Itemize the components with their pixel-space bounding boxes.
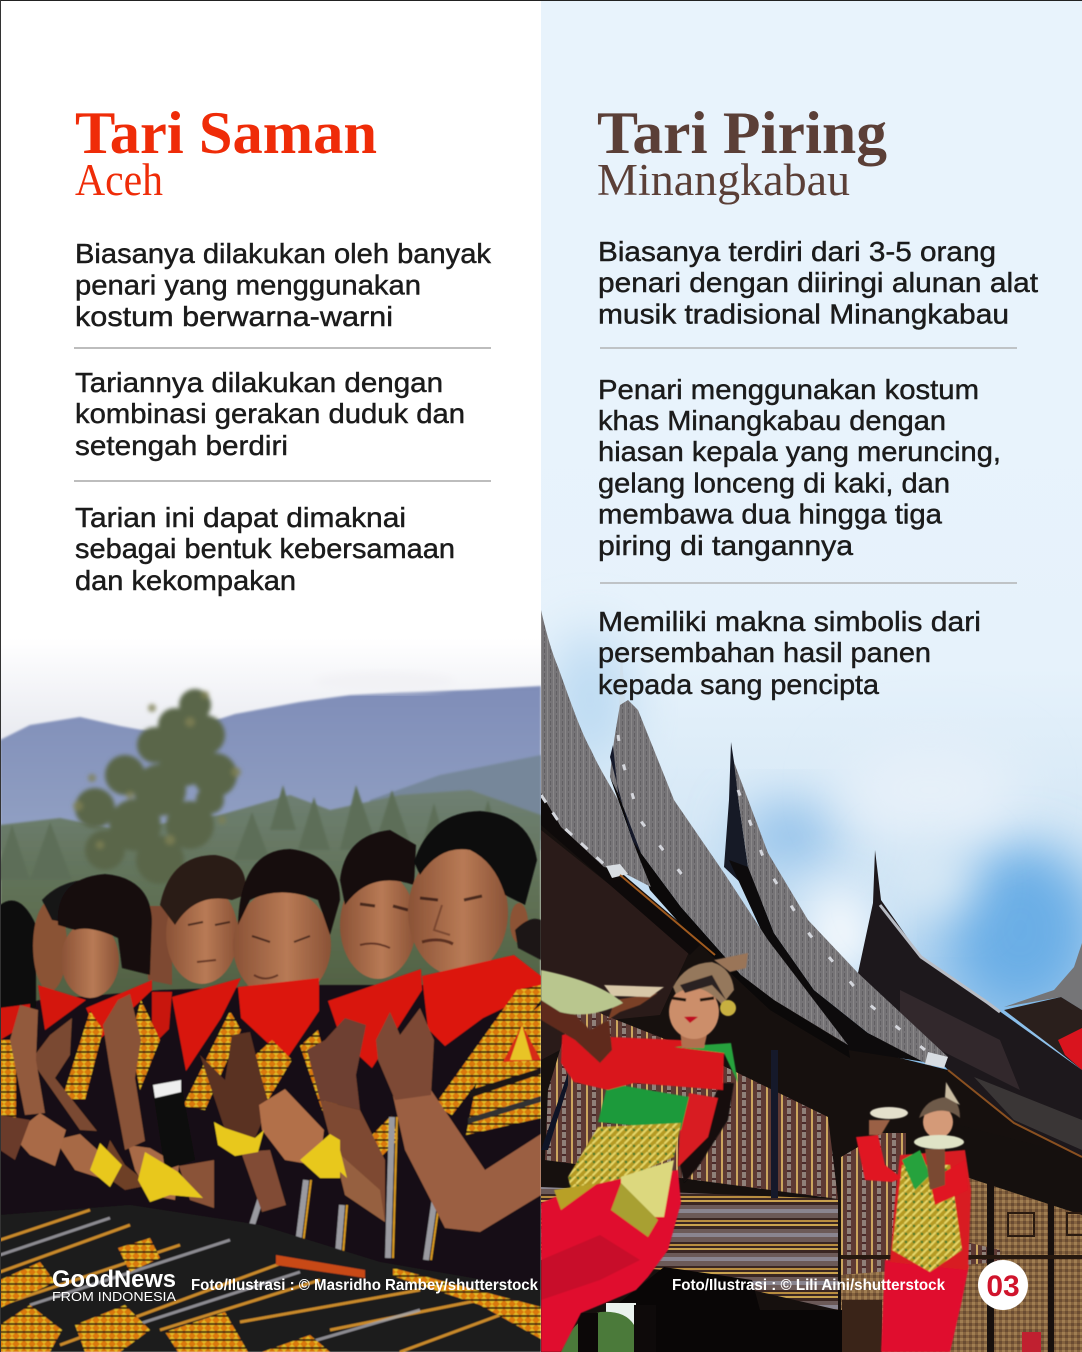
face [669,985,719,1039]
text block: Tari Piring fact 3 [598,606,981,700]
text block: Tari Piring fact 1: Biasanya terdiri dari 3-5 orang [598,236,996,267]
headdress [919,1097,960,1118]
photo: Tari Saman dancers [1,669,541,1352]
subheading: Minangkabau: Minangkabau [597,155,850,205]
text block: Tari Piring fact 3: persembahan hasil panen [598,637,931,668]
text block: Tari Piring fact 1 [598,236,1038,330]
side black [680,1083,734,1183]
forearm and hand [541,1000,612,1064]
roof third [724,742,948,1068]
sky [600,725,1082,1070]
face [923,1106,953,1138]
forearms and hands [0,994,541,1232]
text block: Tari Piring fact 2 [598,374,1001,561]
cloud over mountain [351,690,448,696]
roof far right [1004,943,1082,1010]
pale yellow apron [621,1160,674,1217]
text block: Tari Piring fact 1: penari dengan diiringi alunan alat [598,267,1038,298]
dancer 4 [160,855,246,1071]
gold embroidery [568,1123,681,1190]
text block: Tari Saman fact 3 [75,502,455,596]
dancer 1 [408,811,541,1046]
collar [674,1043,738,1083]
dark body mass [1,984,541,1291]
page number badge: 03 [986,1270,1020,1303]
dancer heads and scarves left group [0,874,172,1046]
sleeve [856,1135,902,1182]
logo: GoodNews from Indonesia: FROM INDONESIA [52,1289,176,1304]
panel: background left [0,0,541,1352]
text block: Tari Piring fact 2: gelang lonceng di kaki, dan [598,468,950,498]
text block: Tari Saman fact 2 [75,367,465,461]
fringe left [554,1183,598,1210]
text block: Tari Piring fact 3: kepada sang pencipta [598,669,879,700]
red pants [541,1170,681,1352]
dancer 2 [328,830,422,1068]
text block: Tari Piring fact 2: Penari menggunakan kostum [598,374,979,405]
text block: Tari Saman fact 1: penari yang menggunakan [75,270,421,300]
sarong [0,1205,541,1352]
yellow wristbands [90,1122,347,1202]
text block: Tari Saman fact 3: sebagai bentuk kebersamaan [75,533,455,564]
roof first [541,610,715,955]
green vest [598,1083,689,1130]
third dancer arm [1058,1028,1082,1070]
roof second [610,640,850,1058]
text block: Tari Saman fact 3: Tarian ini dapat dimaknai [75,502,406,533]
neck [680,1030,708,1048]
text block: Tari Piring fact 3: Memiliki makna simbolis dari [598,606,981,637]
plates [604,985,664,997]
subheading: Aceh: Aceh [75,155,163,205]
dancer 3 [233,849,340,1060]
earring [720,1000,736,1016]
photo credit left: Foto/Ilustrasi : © Masridho Rambey/shutterstock [191,1277,538,1294]
fringe right [611,1183,658,1237]
heading: Tari Piring [597,100,887,205]
photo credit right: Foto/Ilustrasi : © Lili Aini/shutterstock [672,1277,945,1294]
panel: background right [541,0,1082,1352]
text block: Tari Saman fact 3: dan kekompakan [75,565,296,596]
side red [678,1093,718,1167]
sleeve [561,1030,724,1090]
eave line right [948,1070,1082,1157]
distant hill [370,755,541,840]
text block: Tari Saman fact 2: kombinasi gerakan duduk dan [75,398,465,429]
big dancer [541,953,748,1352]
hands [869,1120,890,1135]
page number badge [978,1260,1028,1310]
text block: Tari Piring fact 1: musik tradisional Minangkabau [598,298,1009,330]
shirt stripes [0,985,541,1260]
headdress [673,962,734,1005]
deciduous tree [73,689,241,884]
frame edge top [0,0,1082,1]
text block: Tari Piring fact 2: khas Minangkabau dengan [598,405,946,436]
text block: Tari Saman fact 1: Biasanya dilakukan oleh banyak [75,238,492,269]
wrist cuff and sleeve [153,1080,195,1170]
text block: Tari Piring fact 2: membawa dua hingga tiga [598,498,942,530]
logo: GoodNews from Indonesia: GoodNews [52,1266,176,1293]
small dancer [856,1082,971,1352]
text block: Tari Piring fact 2: hiasan kepala yang meruncing, [598,436,1001,467]
text block: Tari Piring fact 2: piring di tangannya [598,530,853,561]
roof fourth gable [858,850,1082,1157]
pants [881,1260,969,1352]
heading: Tari Piring: Tari Piring [597,100,887,166]
heading: Tari Saman [75,100,377,205]
forest [0,790,541,1010]
heading: Tari Saman: Tari Saman [75,100,377,166]
conifers [0,785,505,880]
plates [870,1107,908,1119]
text block: Tari Saman fact 2: Tariannya dilakukan dengan [75,367,443,398]
text block: Tari Saman fact 1 [75,238,492,332]
frame edge left [0,0,1,1352]
photo: Tari Piring dancers and rumah gadang [541,610,1082,1352]
text block: Tari Saman fact 2: setengah berdiri [75,430,288,461]
text block: Tari Saman fact 1: kostum berwarna-warni [75,301,393,332]
mountain range [0,686,541,850]
building body [541,793,1082,1352]
torso [890,1150,971,1270]
